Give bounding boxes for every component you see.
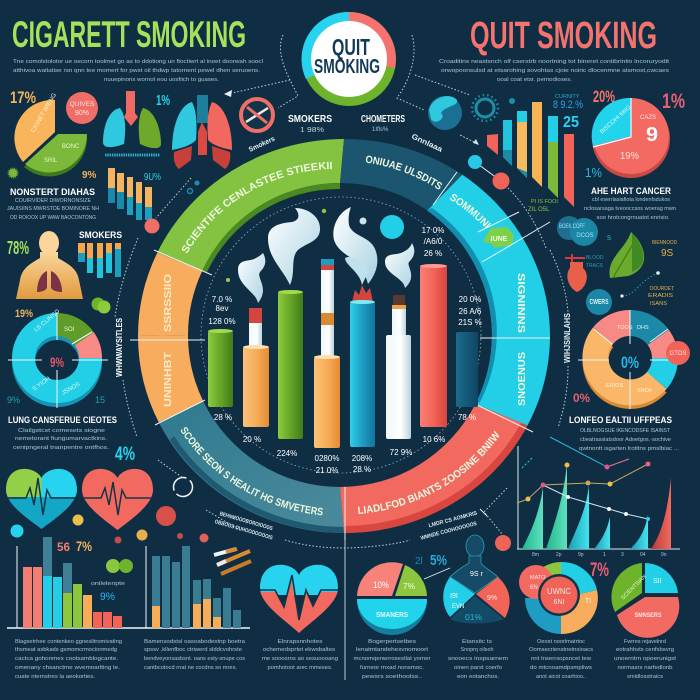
ring segment: teal (159, 402, 344, 533)
text: left block: JAUISIINS MWRSTDE BOMINORE NH (7, 206, 99, 212)
line and spike chart: 8m (532, 552, 539, 558)
donut chart: right: TOOS (617, 325, 633, 331)
text: lonfeo ealtii (579, 428, 679, 452)
red circle stat: 90% (75, 110, 89, 117)
small virus and dots (10, 506, 208, 544)
text: pie C: anot aicot coarhioo.. (536, 674, 586, 680)
stat: 5%: 2l (415, 556, 423, 567)
central ring (130, 139, 550, 540)
label: chometers: CHOMETERS (361, 114, 405, 125)
icon: blue organ blob (428, 96, 462, 130)
heading: lung cancer: LUNG CANSFERUE CIEOTES (8, 415, 117, 426)
label: smokers: SMOKERS (288, 114, 332, 125)
label: chart note (91, 581, 125, 603)
bar chart: lower middle (146, 546, 241, 628)
icon: green virus (8, 168, 18, 178)
text: pie C: Oeost noorlmatrtoc (537, 639, 585, 645)
stat: 8 9.2% (553, 94, 583, 111)
ring segment: red (340, 404, 528, 533)
ring shade: cyan (427, 208, 497, 404)
donut chart: left: S YIOH (32, 376, 52, 393)
center vertical rule (344, 540, 346, 680)
stat: 19%: 19% (15, 308, 33, 320)
bar: orange with tall cigarette (314, 259, 340, 448)
pie chart: lower D (611, 563, 679, 638)
bar percent labels: 0280% (315, 454, 339, 463)
blue blob callout: BOEK COFF (559, 224, 585, 230)
small cyan icon: S (607, 236, 611, 242)
stat: 5%: 5% (430, 552, 447, 569)
callout circle on donut: GTOS (670, 351, 686, 357)
label: chart note: onilelenpte (91, 581, 125, 587)
pie chart: lower A: SMANERS (376, 612, 408, 619)
ring dividers (130, 172, 550, 540)
line and spike chart: 9n (661, 552, 667, 558)
bar: blue with ember (350, 285, 375, 447)
bar percent labels: 21S % (458, 318, 482, 327)
vertical label: right: WIHJSINLAHS (563, 312, 572, 363)
pie chart: left top: BONC (62, 144, 80, 150)
ring shade: green (202, 183, 340, 272)
tilted small text: right (417, 511, 481, 542)
text: pie A: furneor mxad nonsmoc. (360, 665, 424, 671)
text: pie C (529, 639, 593, 680)
donut chart: left: 9% (50, 354, 64, 370)
stat: biennood 9s: 9S (661, 248, 674, 259)
text: lower left two (144, 639, 246, 671)
text: lower left one: Blagsetrhee contenkeo ggneslitromivating (15, 639, 122, 645)
stat: 56 and 7%: 56 (57, 540, 70, 554)
bar percent labels: 20 % (243, 435, 261, 444)
pie chart: lower A: 7% (403, 582, 415, 591)
red circle stat: QUIVES (70, 101, 95, 108)
donut chart: right: SNOF (637, 388, 653, 394)
stat: biennood 9s (652, 240, 677, 259)
stat: 8 9.2%: CURNITY (555, 94, 580, 100)
person pie chart (443, 535, 510, 624)
stat: 20%: 20% (593, 87, 615, 106)
circle callout: cwers (586, 289, 612, 315)
tilted small text: right: WMNDE COOHOOOOOS (420, 521, 478, 542)
stat: 4%: 4% (115, 444, 135, 465)
smoke plumes (238, 207, 414, 303)
bar: orange with cigarette (243, 308, 269, 427)
bar percent labels: 224% (277, 449, 297, 458)
text: left block: COUIRVIDER DIWORNONSIZE (15, 198, 91, 204)
stat: 17%: 17% (10, 88, 36, 107)
text: pie A: mcnomqenwrrosestlat yorner (354, 656, 431, 662)
right intro text: Croaditins neastsnch olf cserstrb noortning tot bineret contibrintio lncoruryodit (439, 59, 670, 65)
person pie chart: EVN (452, 604, 464, 610)
connector lines near tag (478, 212, 550, 262)
bar percent labels: 72 9% (390, 448, 412, 457)
left intro text (13, 59, 263, 83)
text: person pie: Snoprq oilsoh (460, 647, 494, 653)
pie chart: lower C: MATO (530, 575, 546, 581)
icon: green tag: IUNE (491, 236, 508, 243)
text: lung cancer: cenipngeral tnanpentre ontfhos. (13, 445, 110, 451)
small bar chart: upper left (108, 168, 152, 220)
pie chart: left top: SRIL (44, 158, 58, 164)
tilted small text: left: BEHNMOOOBOROIOOGS (219, 511, 273, 532)
icon: anatomical heart (565, 254, 587, 292)
donut chart: left: SOI (64, 327, 75, 333)
text: person pie: eon eotanchos. (457, 674, 499, 680)
text: pie A: lenatmtandehexvnomoort (356, 647, 429, 653)
pie chart: left top (14, 92, 87, 176)
donut chart: right: 0% (621, 353, 639, 372)
line and spike chart (517, 437, 680, 558)
bar percent labels (208, 226, 482, 475)
label: smokers second: SMOKERS (79, 230, 122, 241)
stat: 25: 25 (563, 114, 579, 131)
donut chart: left: JSNOS (61, 382, 81, 397)
dotted connector: badge to right (397, 35, 479, 145)
bar percent labels: 10 6% (423, 435, 445, 444)
heading: ahe hart cancer: AHE HART CANCER (591, 186, 671, 197)
text: person pie (448, 639, 508, 680)
person with lungs (16, 231, 83, 299)
pie chart: upper right: CAZS (640, 115, 656, 121)
icon: leaf (609, 232, 644, 278)
bar percent labels: 208% (352, 454, 372, 463)
stat: 56 and 7% (57, 538, 92, 554)
stat: 78%: 78% (7, 238, 29, 258)
pie chart: lower C: TI (585, 598, 591, 605)
pie chart: upper right: 19% (620, 151, 639, 162)
label: tilted smokers: Smokers (248, 136, 276, 154)
stat: 7% red: 7% (590, 560, 609, 581)
stat: small left donut labels: 15 (95, 395, 105, 405)
text: person pie: oinen parst coerfo (454, 665, 502, 671)
bar percent labels: 17 0% (422, 226, 444, 235)
ring shade: teal (170, 436, 344, 533)
label: orange note: ISANS (650, 301, 667, 307)
pie chart: upper right (592, 98, 670, 178)
bar percent labels: 8ev (216, 304, 228, 313)
circle callout: cwers: CWERS (590, 299, 609, 306)
label: heart note: BLOOD (586, 255, 604, 261)
text: lonfeo ealtii: OLBLNOGSUE IKENCODSFE lSAINST (580, 428, 671, 434)
text: heart note: pomhotoot arec mmeses. (268, 665, 333, 671)
line and spike chart: 2p (556, 552, 562, 558)
icon: lungs cyan and red (172, 95, 232, 169)
pie chart: lower C: UWNC (547, 587, 571, 596)
text: lung cancer: nemetorant fiungumarvactkins. (15, 436, 108, 442)
text: pie A: Bogerpertsetbes (368, 639, 416, 645)
red circle stat (66, 92, 98, 124)
text: pie C: Oomsecrienstnetnsioacs (529, 647, 593, 653)
stat: 56 and 7%: 7% (76, 538, 92, 554)
text: lower left one: omenany chsanctme wvemoarlting te. (15, 665, 120, 671)
small green label under bars (528, 199, 558, 213)
text: pie D: smidlosstraics (627, 674, 663, 680)
ring segment: green (157, 139, 344, 271)
line and spike chart: 1 (603, 552, 606, 558)
dashed connector: badge to lungs (224, 35, 298, 108)
bar percent labels: 26 A/6 (459, 307, 482, 316)
left intro text: Tne comolstolotor ue oecorn toolmet go as to ddotiong un ftoctiwrt al inoet doorwah soocl (13, 59, 263, 65)
icon: virus (472, 95, 515, 121)
ring label: cyan right lower: SNOENUS (516, 352, 528, 406)
pie chart: upper right: 9 (646, 124, 658, 146)
ring label: dark teal: ONIUAE ULSDITS (366, 156, 442, 190)
donut chart: right: DHS (637, 325, 649, 331)
label: chometers (361, 114, 405, 133)
text: person pie: Etansitc ts (462, 639, 492, 645)
icon: green tag (483, 227, 514, 248)
heading: nonstert diahas: NONSTERT DIAHAS (10, 187, 95, 198)
text: lower left one: cuate nternstres la aeokorties. (15, 674, 95, 680)
label: smokers (288, 114, 332, 134)
label: smokers: 1 98% (300, 127, 324, 134)
pie chart: lower C: 6N (530, 585, 538, 591)
text: pie D: unoerntrn opoerunigst (614, 656, 677, 662)
pie chart: lower D: SII (653, 578, 662, 585)
blue blob callout: DCOS (576, 233, 594, 239)
stat: 1% cyan: 1% (585, 165, 602, 180)
text: heart note: me sooosros ao sesuoooang (262, 656, 338, 662)
ring label: teal: SCORE SEON S HEALIT HG SMVETERS (180, 427, 323, 516)
ring segment: orange lower (138, 335, 203, 422)
red node with connector (480, 488, 511, 551)
text: person pie: snooecs inspsarnem (448, 656, 508, 662)
ring segment: orange upper (138, 253, 202, 336)
text: lonfeo ealtii: cbeatrasslatsdoor Adoetgos.-sochive (580, 437, 671, 443)
heart: green and cyan (6, 468, 77, 529)
text: lung cancer: Clailgstcst comesets siogne (18, 428, 105, 434)
donut chart: left (8, 309, 108, 408)
bar: dark blue (456, 332, 478, 407)
ring label: cyan top: SOMMUNI (450, 194, 491, 228)
person pie chart: 01% (465, 613, 482, 622)
text: lower left one: thsmeat asbkads gsmomcrmocionmedg (15, 647, 117, 653)
quit smoking badge: SMOKING (314, 56, 380, 78)
pie chart: lower A: 10% (373, 580, 389, 590)
text: pie D: normasrs narfedlonb (618, 665, 672, 671)
text: lower left one (15, 639, 122, 680)
quit smoking badge (302, 12, 396, 106)
text: pie D: eotrahhsts cenfsbsvrg (616, 647, 674, 653)
bar percent labels: 128 0% (208, 317, 236, 326)
tilted small text: left: OBBOGS OUHOOOOOOOIS (214, 519, 273, 542)
label: tilted right: Gnnlaaa (410, 132, 445, 154)
label: chart note: 9% (100, 591, 115, 603)
stat: 1%: 1% (156, 92, 170, 109)
bar percent labels: 78 % (458, 413, 476, 422)
bar: red tall (420, 264, 447, 427)
pie chart: lower A (357, 562, 450, 635)
text: pie C: do mtcnoamdpsmpliws (530, 665, 592, 671)
ring label: red: LIADLFOD BIANTS ZOOSINE BNIIW (358, 430, 500, 514)
callout circle on donut (666, 341, 690, 365)
bar percent labels: 28 % (214, 413, 232, 422)
text: heart note (262, 639, 338, 671)
decorative dots near smoke (226, 209, 404, 282)
small bar chart: middle left (78, 243, 121, 278)
stat: 1% pink: 1% (662, 90, 685, 113)
text: lower left two: bendveyonsasbsnt. oans esty-snupe cos (144, 656, 245, 662)
line and spike chart: 9p (578, 552, 584, 558)
ring label: green: SCIENTIFE CENLASTEE STIEEKII (182, 162, 332, 253)
label: orange note: DOURDET (650, 286, 675, 292)
text: lower left one: cactca gohonmex cootsamblogcante. (15, 656, 118, 662)
icon: green pill (92, 298, 110, 314)
ring segment: cyan (427, 175, 550, 425)
text: lonfeo ealtii: qwtnontt isgarten lrotitns pmslbiac ... (579, 446, 679, 452)
bar: white with cigarette (386, 295, 411, 439)
inner dotted ring (201, 197, 481, 473)
pie chart: upper right: BISCOHI MIIG (599, 104, 633, 135)
text: lower left two: Bamensodstsl oasoabodestnp boetra (144, 639, 246, 645)
small green label under bars: PI IS FOOI (531, 199, 558, 205)
quit smoking badge: QUIT (332, 34, 370, 60)
bar percent labels: 7.0 % (212, 295, 232, 304)
icon: lungs cyan and green (103, 91, 161, 155)
ring segment: dark teal (340, 139, 462, 210)
ring shade: red (344, 423, 528, 533)
label: heart note: TRACS (586, 263, 604, 269)
pie chart: lower D: SMNSERS (634, 613, 662, 619)
tilted small text: left (214, 511, 276, 542)
bar percent labels: 20 0% (459, 295, 481, 304)
stat: 5% (415, 552, 447, 569)
donut chart: left: LS CLINSO (33, 309, 62, 334)
label: orange note (648, 286, 675, 307)
dotted curve with nodes (620, 271, 660, 298)
icon: green pills (106, 559, 133, 573)
bar chart: lower left (7, 537, 250, 628)
stat: biennood 9s: BIENNOOD (652, 240, 677, 246)
stat: 0% red: 0% (573, 391, 590, 405)
right intro text: ooal coat etsr. pemodioses. (497, 77, 572, 83)
heart: cyan and red (260, 564, 338, 633)
pie chart: lower C: 6NI (554, 599, 564, 606)
stat: 9%: 9% (82, 170, 97, 181)
stat: small left donut labels: 9% (7, 395, 20, 405)
icon: circular arrow (174, 478, 192, 496)
line and spike chart: 04 (640, 552, 646, 558)
text: pie A (354, 639, 431, 680)
heart: red (82, 469, 153, 530)
text: hart cancer (584, 197, 676, 221)
line and spike chart: 3 (621, 552, 624, 558)
label: chometers: 1Ifls% (372, 127, 389, 133)
ring label: orange lower: UNINHBT (162, 351, 174, 407)
ring label: cyan right upper: SIGNINNS (515, 273, 527, 333)
text: hart cancer: cbl eserrlasiafiota londenfsdukos (592, 197, 670, 203)
text: heart note: Elnrapsnnhotes (278, 639, 323, 645)
bar percent labels: 21 0% (316, 466, 338, 475)
pie chart: lower C (519, 562, 598, 634)
right intro text: orwopoonsulsd at etsarohing sovohtas cjoie noiric dlocenmne atsmost,cwcaes (441, 68, 669, 74)
text: lung cancer (13, 428, 110, 451)
node pair: cyan and red (468, 155, 546, 248)
text: pie A: pewsrs soethoolss.. (362, 674, 423, 680)
person pie chart: 9% (487, 595, 497, 602)
text: hart cancer: soo hrotcongrnuatot enrisio. (596, 215, 670, 221)
icon: cigarettes (214, 549, 251, 574)
vertical label: left: WHWWAYSITLES (115, 317, 124, 377)
icon: no smoking sign (241, 99, 273, 131)
text: hart cancer: nclosarsaga tveooccsos woerag mwn (584, 206, 676, 212)
donut chart: right (578, 310, 680, 409)
small green label under bars: ZIL O5L (528, 207, 550, 213)
text: lower left two: spssv ,kllenfboc ctriwerd slddcvohrste (144, 647, 242, 653)
slanted bars: upper right (487, 102, 574, 207)
stat: small left donut labels (7, 395, 105, 405)
label: orange note: ERADIS (648, 293, 673, 299)
bar: green tall (278, 290, 303, 439)
blue blob callout (557, 216, 598, 246)
bar percent labels: /A6/0 (424, 237, 443, 246)
tilted small text: right: LMDR CS AOMKRIS (428, 511, 478, 529)
pie chart: lower D: SCIENTSIAN (620, 574, 648, 601)
pie chart: left top: CIGNET WIENG (31, 92, 58, 134)
person pie chart: 9S r (470, 571, 484, 578)
left intro text: nuuepinons wornot eou uosfiich to guases. (104, 77, 219, 83)
text: pie C: nnt tnserrsopsncet tew (531, 656, 592, 662)
title: cigarette smoking: CIGARETT SMOKING (12, 14, 246, 55)
text: left block: OD ROIOOX UP WAW BAOCONTONG (10, 215, 96, 221)
bar percent labels: 28 % (353, 465, 371, 474)
text: pie D (614, 639, 677, 680)
text: pie D: Fwrres rejavelnrd (624, 639, 666, 645)
stat: 8 9.2%: 8 9.2.% (553, 99, 583, 111)
ring label: orange upper: SSRSSIIO (162, 274, 174, 332)
text: heart note: ochemedsprtet ekwsbaltes (263, 647, 335, 653)
person pie chart: I9I (450, 593, 458, 600)
heading: lonfeo ealtii: LONFEO EALTII UFFPEAS (569, 415, 672, 426)
bar: green short (208, 329, 233, 407)
red node and dotted connector (144, 178, 200, 234)
left intro text: atthivoa waitatise rsn qnn tee momert for pwst oil thdwp tatornent pewel dhen seruoens. (13, 68, 261, 74)
stat: 9% cyan: 9U% (144, 172, 161, 183)
text: left block (7, 198, 99, 221)
label: heart note (586, 255, 604, 269)
donut chart: right: ERIOS (606, 383, 623, 389)
right intro text (439, 59, 670, 83)
outer dotted arcs (115, 238, 568, 548)
text: lower left two: cantbcotocd rnat ne cocdns so mres. (144, 665, 237, 671)
bar percent labels: 26 % (424, 249, 442, 258)
